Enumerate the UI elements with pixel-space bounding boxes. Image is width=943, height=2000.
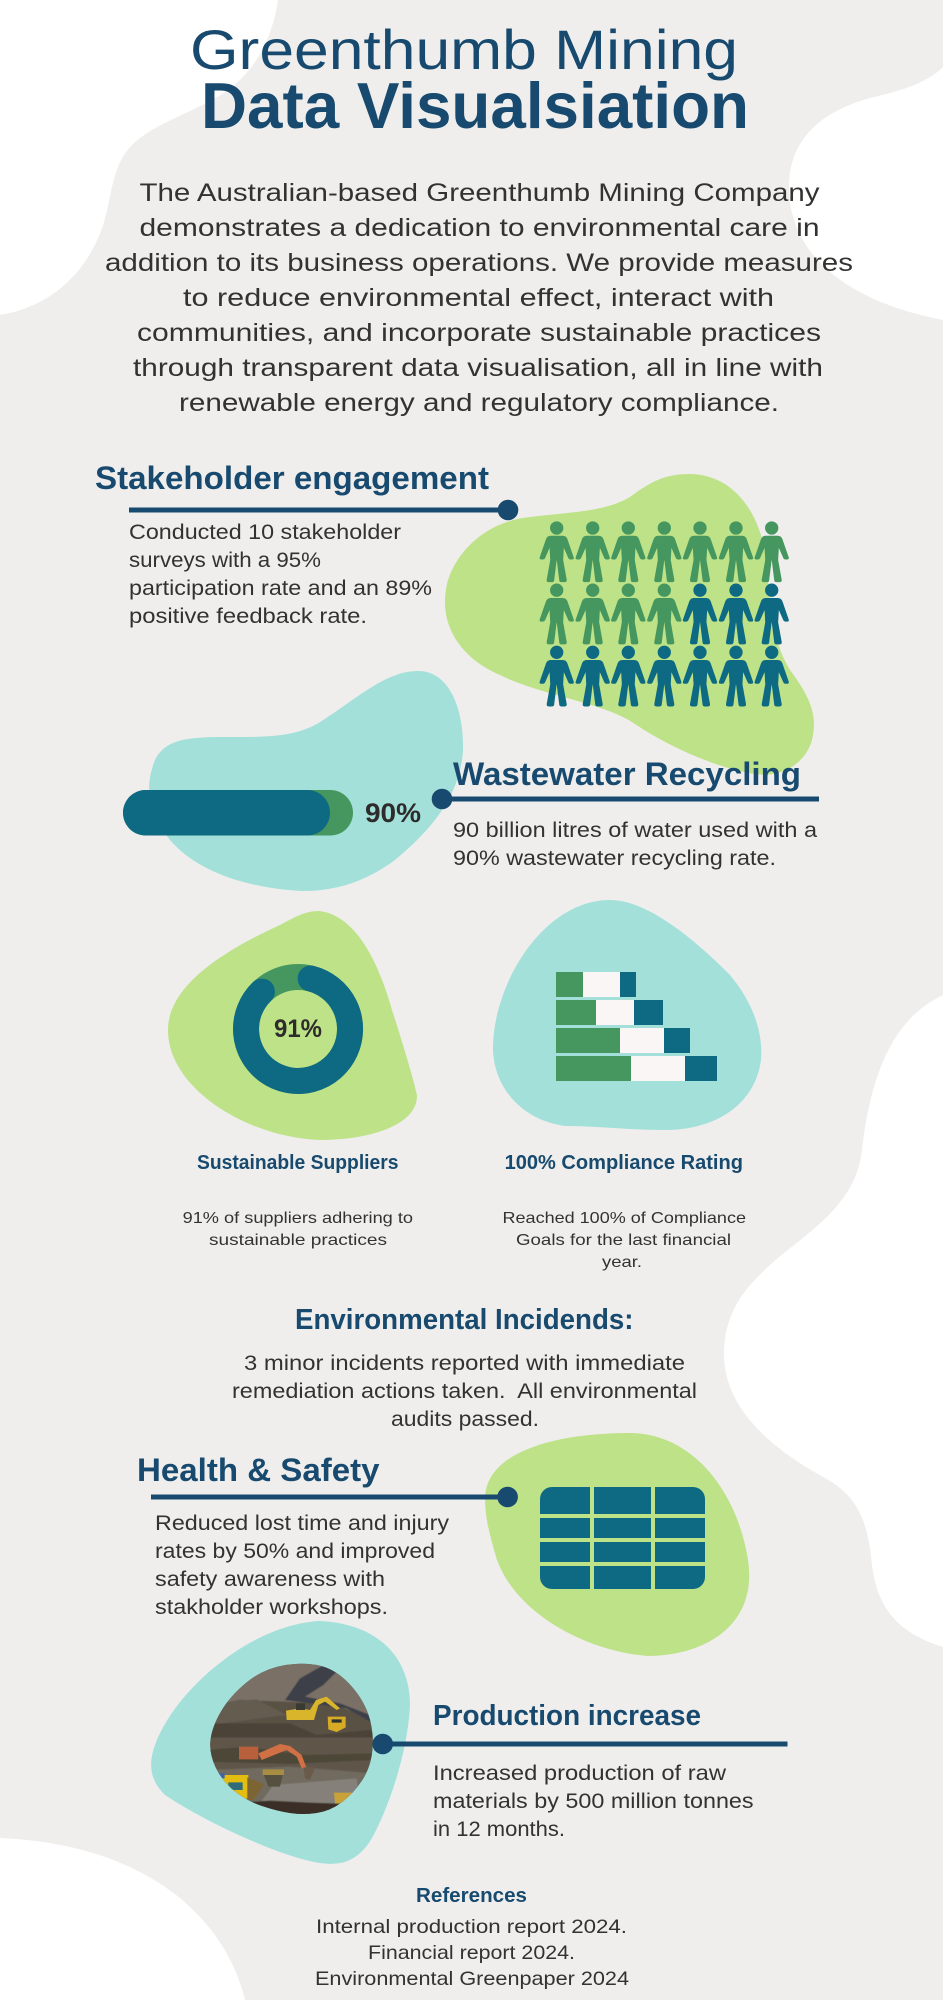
green blob (168, 911, 417, 1140)
heading: Stakeholder engagement (95, 460, 489, 496)
body text (183, 1210, 413, 1249)
green blob (485, 1433, 749, 1656)
intro paragraph: demonstrates a dedication to environmental care in (140, 214, 820, 242)
teal blob (149, 671, 463, 891)
panel: health and safety (137, 1433, 749, 1656)
front yellow truck (220, 1775, 248, 1798)
intro paragraph: to reduce environmental effect, interact with (183, 284, 774, 312)
body text: audits passed. (391, 1408, 539, 1431)
heading: Environmental Incidends: (295, 1304, 634, 1336)
heading: Production increase (433, 1700, 701, 1732)
teal blob (151, 1621, 410, 1864)
references heading: References (416, 1885, 527, 1907)
body text: Conducted 10 stakeholder (129, 521, 401, 544)
donut label: 91% (274, 1015, 322, 1043)
body text (232, 1352, 697, 1431)
body text: 3 minor incidents reported with immediate (244, 1352, 685, 1375)
title (190, 18, 749, 142)
intro paragraph (105, 179, 853, 417)
references list: Internal production report 2024. (316, 1916, 627, 1938)
body text: Goals for the last financial (516, 1232, 731, 1249)
body text (453, 819, 817, 870)
teal blob (493, 900, 761, 1130)
body text: stakholder workshops. (155, 1596, 388, 1619)
body text: rates by 50% and improved (155, 1540, 435, 1563)
body text (502, 1210, 746, 1271)
body text: Reached 100% of Compliance (502, 1210, 746, 1227)
body text: Reduced lost time and injury (155, 1512, 450, 1535)
background blob: top right (789, 67, 943, 320)
body text (129, 521, 432, 628)
intro paragraph: communities, and incorporate sustainable practices (137, 319, 821, 347)
yellow excavator and truck (286, 1697, 340, 1720)
panel: production increase (151, 1621, 787, 1864)
body text: positive feedback rate. (129, 605, 367, 628)
references list: Environmental Greenpaper 2024 (315, 1968, 629, 1990)
body text: sustainable practices (209, 1232, 387, 1249)
panel: wastewater recycling (123, 671, 819, 891)
panel: environmental incidents (232, 1304, 697, 1431)
heading: Sustainable Suppliers (197, 1152, 398, 1174)
title: Data Visualsiation (201, 69, 749, 142)
orange excavator (239, 1747, 258, 1759)
references list (315, 1916, 629, 1990)
connector line (151, 1487, 518, 1507)
body text: 90 billion litres of water used with a (453, 819, 817, 842)
heading: 100% Compliance Rating (505, 1152, 743, 1174)
panel: compliance rating (493, 900, 761, 1271)
people icon chart (540, 522, 788, 706)
heading: Health & Safety (137, 1452, 380, 1488)
progress bar (123, 790, 353, 836)
small truck (334, 1793, 353, 1803)
body text: materials by 500 million tonnes (433, 1790, 754, 1813)
background blob: bottom left (0, 1838, 245, 2000)
body text: 91% of suppliers adhering to (183, 1210, 413, 1227)
body text: participation rate and an 89% (129, 577, 432, 600)
panel: sustainable suppliers (168, 911, 417, 1249)
references list: Financial report 2024. (368, 1942, 575, 1964)
references (315, 1885, 629, 1990)
background blob: top left (0, 0, 278, 315)
body text (155, 1512, 450, 1619)
body text (433, 1762, 754, 1841)
body text: surveys with a 95% (129, 549, 321, 572)
connector line (372, 1734, 788, 1754)
body text: in 12 months. (433, 1818, 565, 1841)
intro paragraph: addition to its business operations. We provide measures (105, 249, 853, 277)
stacked bar chart (556, 972, 717, 1081)
intro paragraph: The Australian-based Greenthumb Mining Company (140, 179, 820, 207)
body text: year. (602, 1254, 642, 1271)
title: Greenthumb Mining (190, 18, 738, 81)
green blob (445, 474, 814, 775)
connector line (432, 789, 819, 809)
connector line (129, 500, 518, 520)
body text: Increased production of raw (433, 1762, 727, 1785)
percentage label: 90% (365, 798, 421, 828)
body text: 90% wastewater recycling rate. (453, 847, 776, 870)
heading: Wastewater Recycling (453, 756, 801, 792)
intro paragraph: renewable energy and regulatory compliance. (179, 389, 779, 417)
donut chart (246, 977, 350, 1081)
body text: safety awareness with (155, 1568, 385, 1591)
table icon (540, 1487, 705, 1589)
mine photo illustration (210, 1664, 373, 1814)
panel: stakeholder engagement (95, 460, 814, 775)
body text: remediation actions taken. All environmental (232, 1380, 697, 1403)
background blob: right (724, 995, 943, 1647)
centre truck (263, 1769, 284, 1775)
intro paragraph: through transparent data visualisation, all in line with (133, 354, 823, 382)
